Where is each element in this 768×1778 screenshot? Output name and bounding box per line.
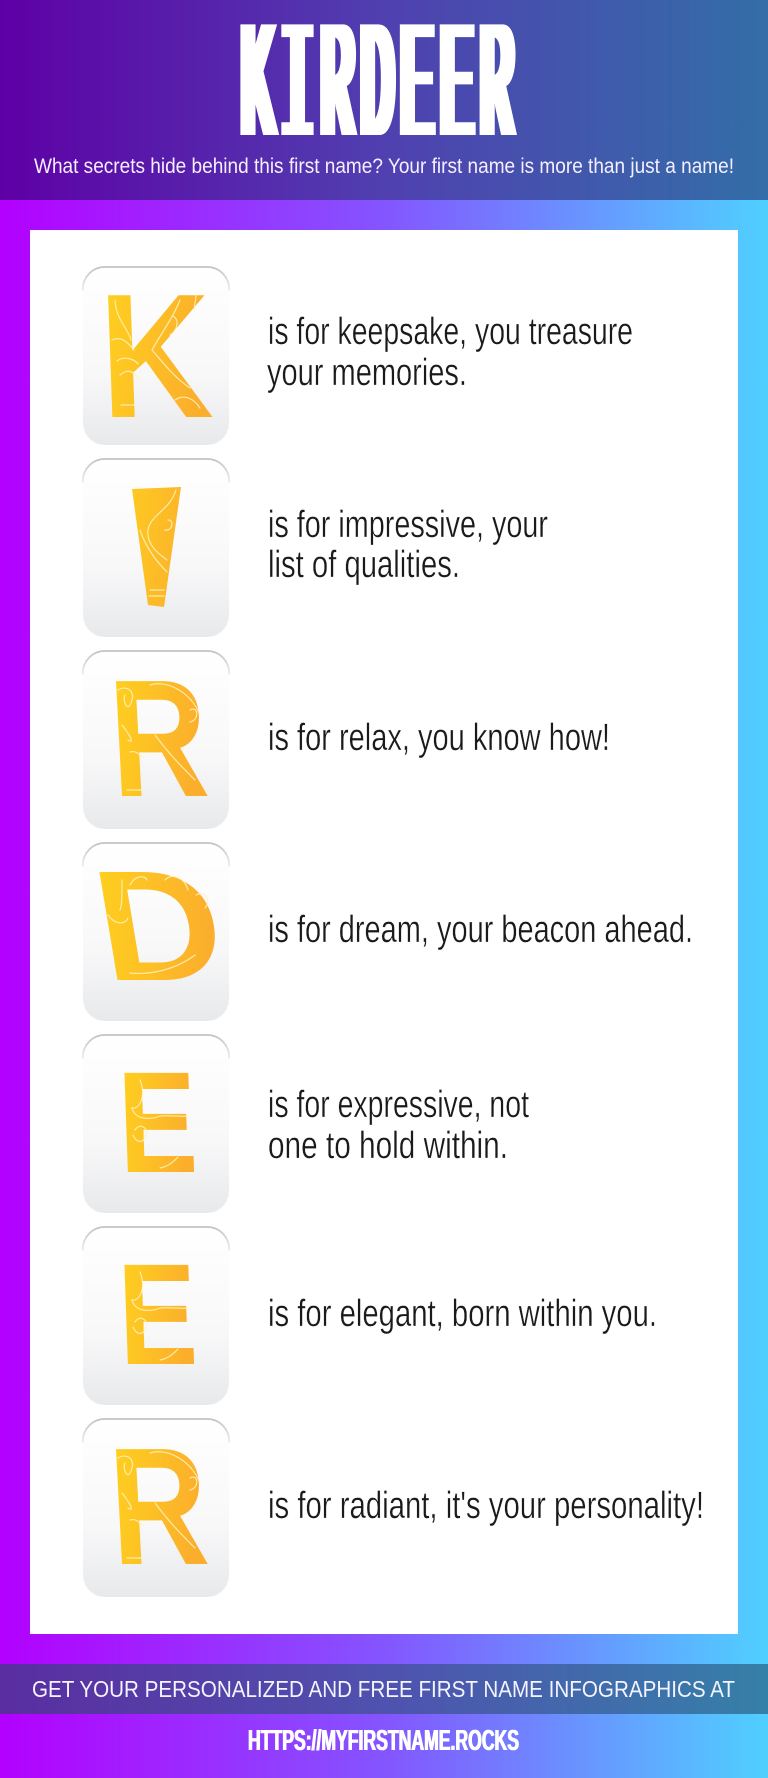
row R second (83, 1413, 704, 1600)
tile K: K (96, 257, 215, 455)
text I (268, 504, 548, 586)
tile D: D (82, 839, 236, 1014)
footer url: HTTPS://MYFIRSTNAME.ROCKS (248, 1725, 519, 1757)
tile E: E (115, 1042, 200, 1203)
row E (83, 1035, 529, 1213)
tile I: I (106, 447, 206, 649)
footer band (0, 1664, 768, 1714)
row K (83, 257, 633, 455)
header band (0, 0, 768, 200)
text K (267, 311, 633, 394)
tile E second (83, 1227, 229, 1405)
text K: your memories. (267, 352, 467, 394)
tile E (83, 1035, 229, 1213)
text R: is for relax, you know how! (268, 717, 610, 759)
white panel (30, 230, 738, 1634)
tile E second: E (115, 1234, 200, 1395)
tile R second: R (105, 1413, 212, 1600)
row E second (83, 1227, 657, 1405)
row R (83, 645, 610, 832)
text K: is for keepsake, you treasure (268, 311, 633, 353)
text E: is for expressive, not (268, 1084, 529, 1126)
text I: is for impressive, your (268, 504, 548, 546)
row D (82, 839, 693, 1021)
tile I (83, 447, 229, 649)
title: KIRDEER (241, 0, 520, 186)
text E (268, 1084, 529, 1167)
text I: list of qualities. (268, 544, 460, 586)
text E second: is for elegant, born within you. (268, 1293, 657, 1335)
row I (83, 447, 548, 649)
text E: one to hold within. (268, 1125, 508, 1167)
tile R: R (105, 645, 212, 832)
